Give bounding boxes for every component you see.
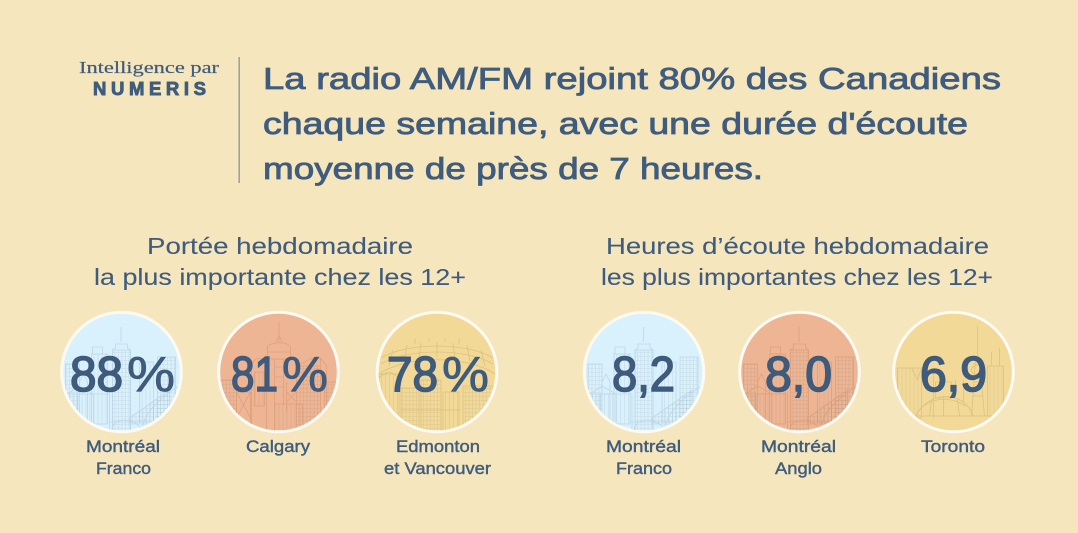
stat: Toronto 6,9: 6,9 [920,348,987,402]
stat: Montréal Anglo 8,0: Anglo [775,460,822,478]
stat: Edmonton et Vancouver 78%: et Vancouver [384,460,492,478]
logo tagline: Intelligence par [79,58,219,77]
heading: weekly reach: Portée hebdomadaire [147,233,413,259]
stat: Edmonton et Vancouver 78%: 78 [387,348,438,402]
stat: Montréal Franco 88%: Montréal [86,438,160,456]
stat: Toronto 6,9 [894,312,1013,456]
stat: Montréal Anglo 8,0: Montréal [761,438,836,456]
stat: Montréal Franco 8,2: 8,2 [612,348,675,402]
stat: Montréal Franco 8,2: Franco [616,460,672,478]
stat: Montréal Franco 88% [62,312,181,478]
stat: Montréal Anglo 8,0 [740,312,859,478]
stat: Montréal Franco 8,2: Montréal [606,438,681,456]
stat: Montréal Franco 88%: % [127,348,175,402]
title [263,61,1001,186]
stat: Edmonton et Vancouver 78% [377,312,497,478]
stat: Montréal Anglo 8,0: 8,0 [765,348,832,402]
header divider [238,57,240,183]
title: chaque semaine, avec une durée d'écoute [263,106,968,141]
stat: Montréal Franco 88%: Franco [96,460,151,478]
logo wordmark: NUMERIS [93,78,206,99]
stat: Montréal Franco 8,2 [584,312,704,478]
stat: Calgary 81%: % [282,348,328,402]
stat: Edmonton et Vancouver 78%: % [442,348,489,402]
stat: Calgary 81%: Calgary [246,438,311,456]
stat: Montréal Franco 88%: 88 [70,348,123,402]
title: moyenne de près de 7 heures. [263,151,763,186]
logo: Intelligence par Numeris [79,58,219,99]
heading: weekly listening hours: Heures d’écoute hebdomadaire [606,233,989,259]
heading: weekly reach: la plus importante chez les 12+ [94,264,466,290]
stat: Toronto 6,9: Toronto [921,438,985,456]
heading: weekly reach [94,233,466,290]
title: La radio AM/FM rejoint 80% des Canadiens [263,61,1001,96]
stat: Calgary 81% [219,312,338,456]
heading: weekly listening hours: les plus importantes chez les 12+ [601,264,993,290]
stat: Edmonton et Vancouver 78%: Edmonton [396,438,480,456]
stat: Calgary 81%: 81 [231,348,278,402]
heading: weekly listening hours [601,233,993,290]
